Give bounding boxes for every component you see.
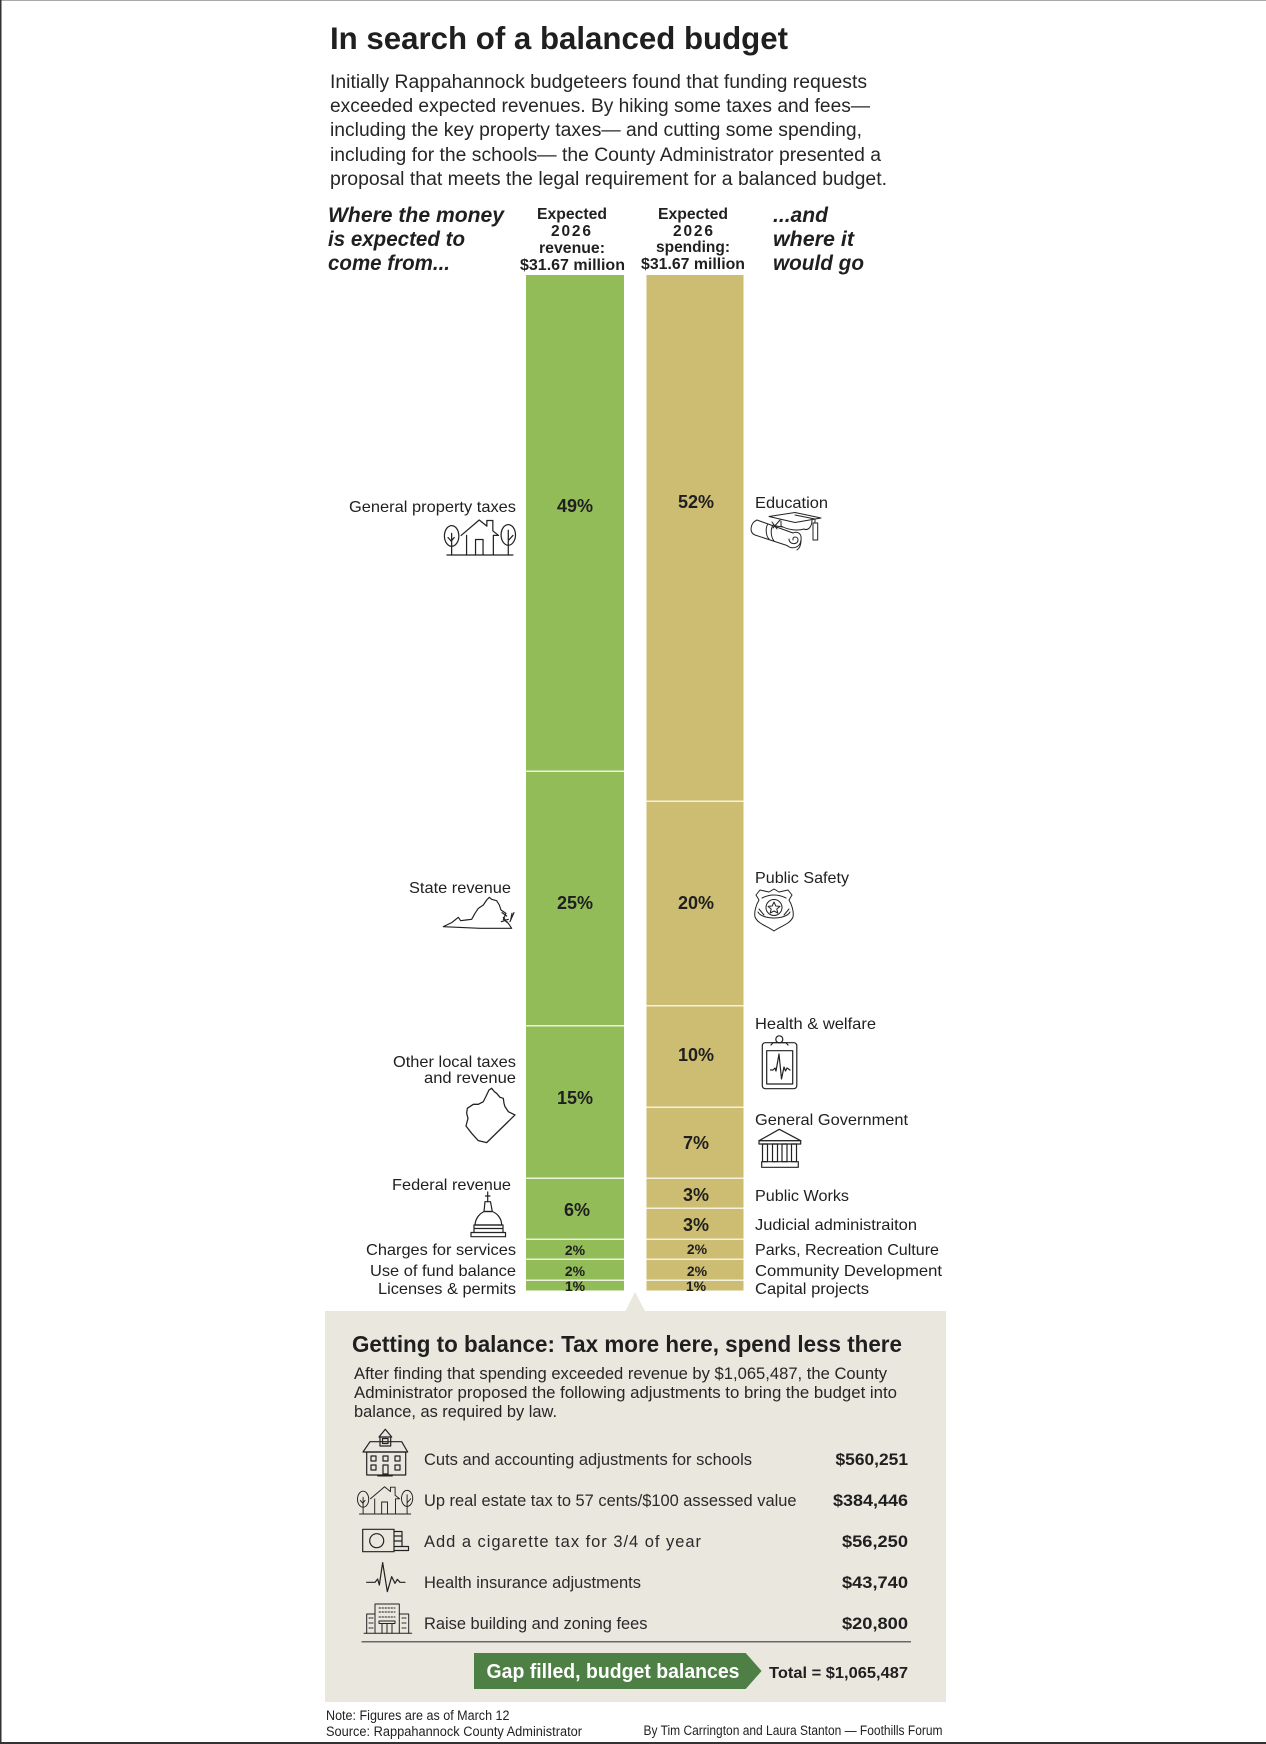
label: parks, recreation, culture: Parks, Recreation Culture — [755, 1242, 939, 1259]
label: other local taxes and revenue: Other local taxes — [393, 1054, 516, 1071]
intro text block: including the key property taxes— and cutting some spending, — [330, 120, 862, 141]
icon: capitol dome — [471, 1192, 506, 1237]
label: charges for services: Charges for services — [366, 1242, 516, 1259]
label: public safety: Public Safety — [755, 870, 849, 887]
label: general property taxes: General property taxes — [349, 499, 516, 516]
right heading: where it would go — [773, 203, 864, 275]
revenue column heading: revenue: — [539, 240, 605, 257]
spending column heading: Expected — [658, 206, 728, 223]
panel: getting to balance — [325, 1292, 946, 1702]
byline: By Tim Carrington and Laura Stanton — Foothills Forum — [644, 1723, 942, 1738]
row: schools: Cuts and accounting adjustments for schools — [424, 1451, 752, 1469]
note and source — [326, 1708, 582, 1739]
row: building and zoning fees: Raise building and zoning fees — [424, 1615, 648, 1633]
label: licenses and permits: Licenses & permits — [378, 1281, 516, 1298]
icon: government building — [759, 1129, 801, 1167]
arrow: gap filled — [474, 1653, 762, 1689]
left heading: where the money comes from — [328, 203, 505, 275]
icon: police badge — [755, 889, 793, 931]
spending stacked bar: 2% — [687, 1263, 708, 1279]
row: schools — [424, 1451, 908, 1469]
row: cigarette tax: $56,250 — [842, 1533, 908, 1551]
arrow: gap filled: Gap filled, budget balances — [486, 1660, 740, 1683]
spending stacked bar: 20% — [678, 893, 714, 913]
spending column heading: 2026 — [673, 223, 713, 240]
panel intro text: balance, as required by law. — [354, 1403, 557, 1421]
panel intro text: After finding that spending exceeded revenue by $1,065,487, the County — [354, 1365, 888, 1383]
intro text block: Initially Rappahannock budgeteers found that funding requests — [330, 72, 867, 93]
row: real estate tax: Up real estate tax to 57 cents/$100 assessed value — [424, 1492, 796, 1510]
spending stacked bar: 3% — [683, 1215, 709, 1235]
panel intro text: Administrator proposed the following adjustments to bring the budget into — [354, 1384, 897, 1402]
row: building and zoning fees: $20,800 — [842, 1615, 908, 1633]
right heading: where it would go: where it — [773, 227, 855, 251]
label: judicial administration: Judicial administraiton — [755, 1217, 917, 1234]
intro text block: including for the schools— the County Administrator presented a — [330, 145, 881, 166]
revenue column heading — [520, 206, 625, 274]
revenue stacked bar: 15% — [557, 1088, 593, 1108]
revenue stacked bar: 2% — [565, 1242, 586, 1258]
revenue column heading: Expected — [537, 206, 607, 223]
revenue stacked bar — [526, 275, 624, 1294]
label: community development: Community Development — [755, 1263, 943, 1280]
spending stacked bar: 1% — [686, 1278, 707, 1294]
revenue stacked bar: 1% — [565, 1278, 586, 1294]
icon: clipboard with pulse — [762, 1036, 797, 1089]
revenue stacked bar: 2% — [565, 1263, 586, 1279]
label: general government: General Government — [755, 1112, 909, 1129]
spending stacked bar: 10% — [678, 1045, 714, 1065]
label: use of fund balance: Use of fund balance — [370, 1263, 516, 1280]
row: cigarette tax — [424, 1533, 908, 1551]
left heading: where the money comes from: is expected to — [328, 227, 465, 251]
spending column heading — [641, 206, 745, 273]
revenue stacked bar: 25% — [557, 893, 593, 913]
revenue column heading: $31.67 million — [520, 257, 625, 274]
total: Total = $1,065,487 — [769, 1665, 908, 1682]
title: In search of a balanced budget — [330, 20, 788, 56]
revenue stacked bar: 49% — [557, 496, 593, 516]
spending column heading: spending: — [656, 239, 730, 256]
intro text block: exceeded expected revenues. By hiking some taxes and fees— — [330, 96, 870, 117]
panel background with pointer — [325, 1292, 946, 1702]
revenue stacked bar: 6% — [564, 1200, 590, 1220]
panel heading: Getting to balance: Tax more here, spend less there — [352, 1331, 902, 1357]
icon: municipal building — [364, 1604, 412, 1633]
intro text block — [330, 72, 887, 190]
icon: house and trees small — [358, 1487, 413, 1514]
label: state revenue: State revenue — [409, 880, 511, 897]
icon: pulse line — [367, 1563, 405, 1592]
row: health insurance: $43,740 — [842, 1574, 908, 1592]
label: public works: Public Works — [755, 1188, 849, 1205]
left heading: where the money comes from: come from... — [328, 251, 450, 275]
row: building and zoning fees — [424, 1615, 908, 1633]
spending stacked bar — [646, 275, 744, 1294]
spending column heading: $31.67 million — [641, 256, 745, 273]
label: other local taxes and revenue: and revenue — [424, 1070, 516, 1087]
row: schools: $560,251 — [836, 1451, 908, 1469]
note and source: Source: Rappahannock County Administrator — [326, 1724, 582, 1739]
label: other local taxes and revenue — [393, 1054, 516, 1087]
icon: cigarette pack — [363, 1529, 408, 1552]
icon: Virginia outline — [443, 897, 514, 928]
right heading: where it would go: would go — [773, 251, 864, 275]
row: health insurance — [424, 1574, 908, 1592]
intro text block: proposal that meets the legal requirement for a balanced budget. — [330, 169, 887, 190]
left heading: where the money comes from: Where the money — [328, 203, 505, 227]
label: health and welfare: Health & welfare — [755, 1016, 876, 1033]
icon: house and trees — [444, 520, 515, 555]
spending stacked bar: 7% — [683, 1133, 709, 1153]
spending stacked bar: 2% — [687, 1241, 708, 1257]
spending stacked bar: 52% — [678, 492, 714, 512]
icon: county outline — [466, 1088, 515, 1143]
row: real estate tax: $384,446 — [833, 1492, 908, 1510]
revenue column heading: 2026 — [551, 223, 591, 240]
row: cigarette tax: Add a cigarette tax for 3/4 of year — [424, 1533, 702, 1551]
icon: diploma and graduation cap — [751, 512, 821, 550]
panel intro text — [354, 1365, 897, 1421]
spending stacked bar: 3% — [683, 1185, 709, 1205]
icon: schoolhouse — [363, 1429, 408, 1476]
note and source: Note: Figures are as of March 12 — [326, 1708, 510, 1723]
row: health insurance: Health insurance adjustments — [424, 1574, 641, 1592]
label: capital projects: Capital projects — [755, 1281, 869, 1298]
label: education: Education — [755, 495, 828, 512]
right heading: where it would go: ...and — [773, 203, 829, 227]
label: federal revenue: Federal revenue — [392, 1177, 511, 1194]
